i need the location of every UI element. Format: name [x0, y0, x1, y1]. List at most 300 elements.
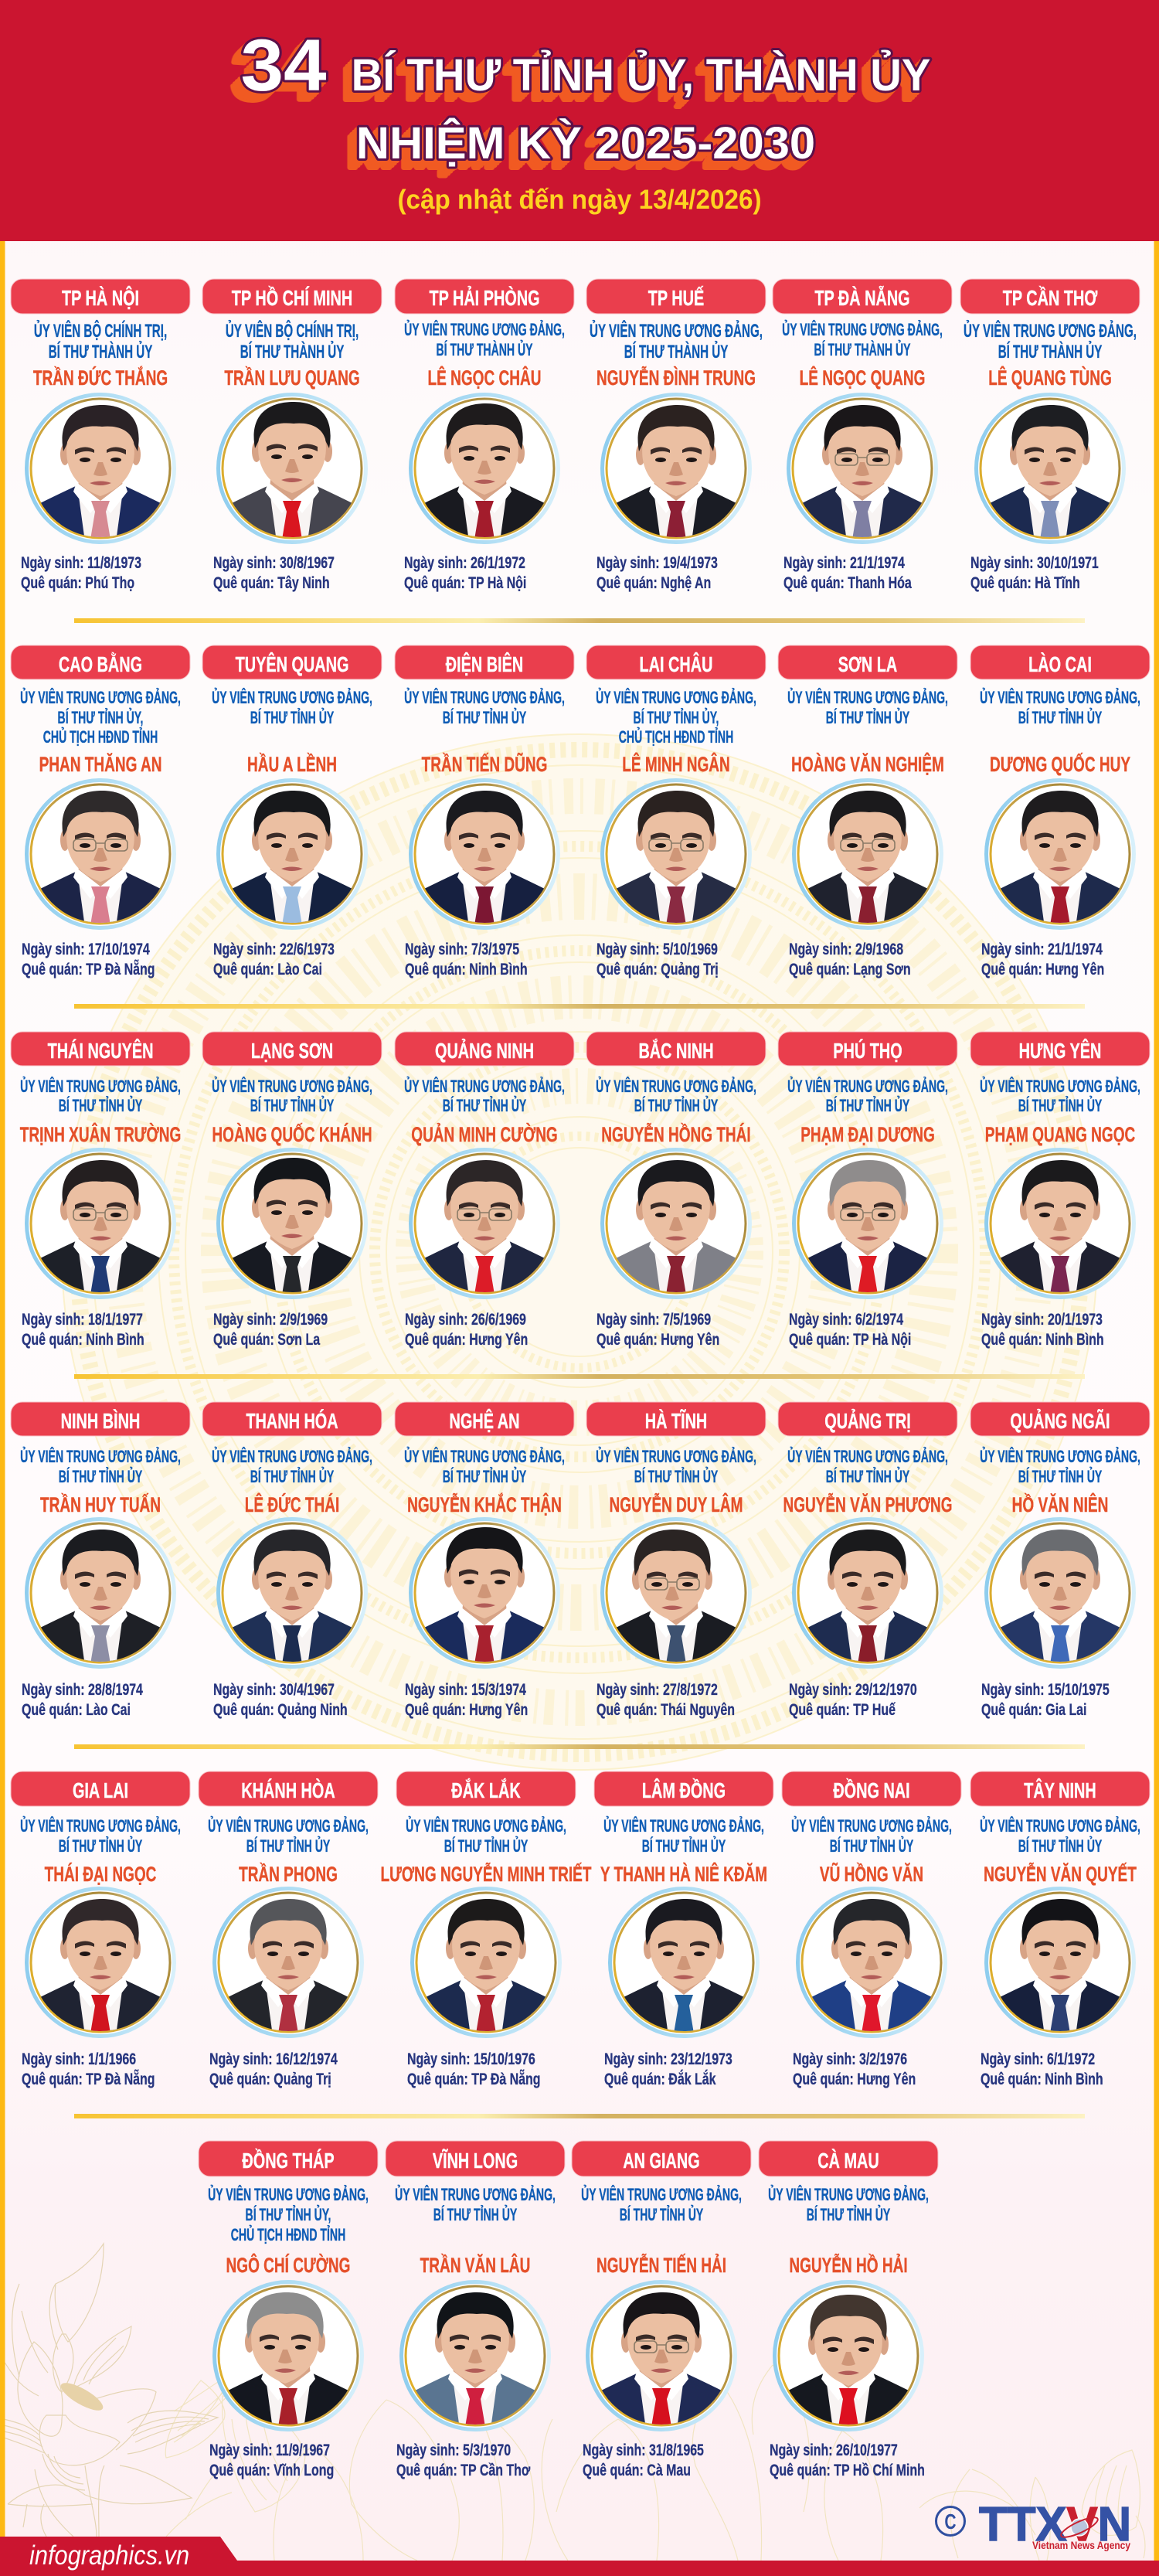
birth and hometown: Quê quán: TP Đà Nẵng — [22, 959, 155, 978]
birth and hometown: Ngày sinh: 21/1/1974 — [783, 553, 905, 572]
pill: Hà Tĩnh — [586, 1402, 766, 1436]
birth and hometown: Ngày sinh: 7/5/1969 — [596, 1310, 711, 1329]
role: ỦY VIÊN TRUNG ƯƠNG ĐẢNG, — [404, 320, 565, 339]
pill: Hà Tĩnh: HÀ TĨNH — [645, 1409, 707, 1434]
birth and hometown: Quê quán: TP Hồ Chí Minh — [770, 2461, 925, 2479]
birth and hometown: Quê quán: Sơn La — [213, 1330, 321, 1349]
pill: Lâm Đồng — [594, 1771, 773, 1806]
pill: TP Đà Nẵng — [773, 279, 952, 314]
birth and hometown: Ngày sinh: 6/2/1974 — [789, 1310, 904, 1329]
birth and hometown — [22, 1680, 143, 1719]
name: TRẦN HUY TUẤN — [40, 1492, 161, 1516]
pill: Lạng Sơn: LẠNG SƠN — [251, 1040, 333, 1063]
role: BÍ THƯ TỈNH ỦY — [250, 1467, 335, 1486]
name: NGUYỄN TIẾN HẢI — [596, 2251, 726, 2277]
pill: Nghệ An: NGHỆ AN — [450, 1409, 519, 1434]
role: BÍ THƯ TỈNH ỦY — [444, 1836, 529, 1856]
role: CHỦ TỊCH HĐND TỈNH — [619, 727, 733, 747]
name: TRẦN TIẾN DŨNG — [422, 752, 547, 776]
birth and hometown: Ngày sinh: 30/4/1967 — [213, 1680, 335, 1699]
role — [791, 1816, 952, 1856]
card: TP Đà Nẵng — [773, 279, 952, 592]
footer flag with site name — [0, 2537, 237, 2576]
pill: Quảng Ngãi — [970, 1402, 1150, 1436]
card: Tuyên Quang — [202, 645, 382, 978]
role: BÍ THƯ TỈNH ỦY — [642, 1836, 726, 1856]
pill: TP Hồ Chí Minh — [202, 279, 382, 314]
role: ỦY VIÊN TRUNG ƯƠNG ĐẢNG, — [20, 1077, 181, 1096]
name: Y THANH HÀ NIÊ KĐĂM — [600, 1862, 767, 1886]
birth and hometown — [596, 553, 718, 592]
pill: Tây Ninh — [970, 1771, 1150, 1806]
role: BÍ THƯ TỈNH ỦY, — [634, 708, 719, 727]
birth and hometown: Quê quán: Quảng Trị — [596, 960, 719, 978]
portrait — [794, 1150, 941, 1301]
decorative bronze drum pattern — [62, 734, 1097, 1770]
card: Quảng Ninh — [395, 1032, 574, 1349]
birth and hometown: Ngày sinh: 11/8/1973 — [21, 553, 141, 572]
birth and hometown: Quê quán: Cà Mau — [583, 2461, 691, 2479]
pill: Khánh Hòa — [199, 1771, 378, 1806]
card: Quảng Trị — [778, 1402, 957, 1719]
role: ỦY VIÊN TRUNG ƯƠNG ĐẢNG, — [212, 688, 372, 707]
portrait — [788, 394, 936, 546]
pill: TP Cần Thơ — [960, 279, 1140, 314]
role — [787, 1447, 948, 1486]
role: ỦY VIÊN TRUNG ƯƠNG ĐẢNG, — [208, 2185, 369, 2204]
birth and hometown: Ngày sinh: 26/10/1977 — [770, 2441, 898, 2459]
birth and hometown: Quê quán: Thanh Hóa — [783, 573, 912, 592]
role: BÍ THƯ TỈNH ỦY — [620, 2205, 704, 2224]
pill: Đắk Lắk — [396, 1771, 576, 1806]
birth and hometown: Ngày sinh: 28/8/1974 — [22, 1680, 143, 1699]
birth and hometown — [793, 2050, 916, 2088]
card: Phú Thọ — [778, 1032, 957, 1349]
pill: Đồng Tháp: ĐỒNG THÁP — [242, 2149, 335, 2173]
role: ỦY VIÊN BỘ CHÍNH TRỊ, — [34, 319, 167, 342]
role: ỦY VIÊN TRUNG ƯƠNG ĐẢNG, — [212, 1077, 372, 1096]
birth and hometown — [770, 2441, 925, 2479]
name: HOÀNG QUỐC KHÁNH — [212, 1122, 372, 1146]
card: TP Hà Nội — [11, 279, 190, 592]
birth and hometown: Quê quán: Ninh Bình — [981, 2070, 1103, 2088]
portrait — [218, 1519, 366, 1670]
name: TRẦN ĐỨC THẮNG — [33, 366, 168, 390]
role — [590, 319, 763, 362]
portrait — [986, 781, 1134, 931]
pill: TP Cần Thơ: TP CẦN THƠ — [1003, 286, 1098, 311]
card: TP Hải Phòng — [395, 279, 574, 592]
pill: Lào Cai: LÀO CAI — [1028, 652, 1092, 677]
role — [581, 2185, 742, 2224]
pill: Ninh Bình: NINH BÌNH — [61, 1409, 140, 1434]
footer flag with site name: infographics.vn — [29, 2540, 189, 2570]
name: NGUYỄN HỒNG THÁI — [601, 1121, 751, 1146]
birth and hometown: Ngày sinh: 30/8/1967 — [213, 553, 335, 572]
birth and hometown: Ngày sinh: 5/10/1969 — [596, 940, 718, 958]
birth and hometown — [21, 553, 141, 592]
pill: Thái Nguyên: THÁI NGUYÊN — [48, 1039, 153, 1063]
birth and hometown — [405, 1310, 528, 1349]
card: TP Cần Thơ — [960, 279, 1140, 592]
pill: Vĩnh Long — [386, 2141, 565, 2176]
portrait — [797, 1889, 946, 2040]
birth and hometown — [396, 2441, 531, 2479]
birth and hometown — [783, 553, 912, 592]
TTXVN logo: Vietnam News Agency — [1032, 2539, 1130, 2551]
role: ỦY VIÊN TRUNG ƯƠNG ĐẢNG, — [980, 1816, 1140, 1836]
name: HỒ VĂN NIÊN — [1012, 1492, 1108, 1516]
role: ỦY VIÊN TRUNG ƯƠNG ĐẢNG, — [596, 688, 756, 707]
role — [404, 1447, 565, 1486]
card: Nghệ An — [395, 1402, 574, 1719]
card: Lâm Đồng — [594, 1771, 773, 2088]
pill: Lạng Sơn — [202, 1032, 382, 1066]
portrait — [402, 2282, 549, 2433]
pill: Gia Lai — [11, 1771, 190, 1806]
name: LÊ QUANG TÙNG — [988, 366, 1112, 390]
birth and hometown: Ngày sinh: 17/10/1974 — [22, 940, 150, 958]
birth and hometown: Ngày sinh: 22/6/1973 — [213, 940, 335, 958]
pill: Đồng Nai: ĐỒNG NAI — [833, 1778, 910, 1803]
pill: TP Hồ Chí Minh: TP HỒ CHÍ MINH — [232, 286, 352, 311]
role: ỦY VIÊN TRUNG ƯƠNG ĐẢNG, — [787, 1077, 948, 1096]
card: Quảng Ngãi — [970, 1402, 1150, 1719]
birth and hometown: Quê quán: Hưng Yên — [793, 2070, 916, 2088]
role — [212, 688, 372, 727]
birth and hometown: Quê quán: Hưng Yên — [405, 1330, 528, 1349]
birth and hometown — [209, 2441, 334, 2479]
portrait — [26, 1150, 175, 1301]
role: ỦY VIÊN TRUNG ƯƠNG ĐẢNG, — [596, 1447, 756, 1466]
birth and hometown — [209, 2050, 338, 2088]
birth and hometown: Quê quán: Gia Lai — [981, 1700, 1087, 1719]
birth and hometown: Quê quán: Vĩnh Long — [209, 2461, 334, 2479]
pill: Tây Ninh: TÂY NINH — [1024, 1778, 1096, 1803]
role — [208, 2185, 369, 2244]
role: BÍ THƯ TỈNH ỦY — [433, 2205, 518, 2224]
pill: Quảng Ngãi: QUẢNG NGÃI — [1010, 1407, 1110, 1434]
birth and hometown — [981, 2050, 1103, 2088]
role — [596, 1447, 756, 1486]
role: ỦY VIÊN BỘ CHÍNH TRỊ, — [226, 319, 359, 342]
name: NGUYỄN VĂN PHƯƠNG — [783, 1491, 953, 1516]
birth and hometown: Ngày sinh: 26/6/1969 — [405, 1310, 526, 1329]
birth and hometown: Ngày sinh: 15/10/1975 — [981, 1680, 1110, 1699]
birth and hometown: Quê quán: TP Đà Nẵng — [22, 2069, 155, 2088]
name: THÁI ĐẠI NGỌC — [45, 1862, 157, 1886]
birth and hometown: Quê quán: Thái Nguyên — [596, 1700, 735, 1719]
birth and hometown: Quê quán: Quảng Ninh — [213, 1700, 348, 1719]
card: Lạng Sơn — [202, 1032, 382, 1349]
birth and hometown — [22, 2050, 155, 2088]
role — [980, 1816, 1140, 1856]
birth and hometown — [213, 1680, 348, 1719]
birth and hometown: Quê quán: Hưng Yên — [596, 1330, 719, 1349]
pill: Hưng Yên: HƯNG YÊN — [1019, 1039, 1101, 1063]
birth and hometown — [981, 1680, 1110, 1719]
card: Cà Mau — [759, 2141, 938, 2479]
name: HẦU A LỀNH — [247, 752, 337, 776]
role: CHỦ TỊCH HĐND TỈNH — [231, 2225, 345, 2244]
pill: TP Hải Phòng — [395, 279, 574, 314]
birth and hometown: Ngày sinh: 20/1/1973 — [981, 1310, 1103, 1329]
card: Ninh Bình — [11, 1402, 190, 1719]
pill: TP Huế — [586, 279, 766, 314]
pill: Cà Mau — [759, 2141, 938, 2176]
title line 2: NHIỆM KỲ 2025-2030 — [356, 117, 815, 168]
role: ỦY VIÊN TRUNG ƯƠNG ĐẢNG, — [404, 688, 565, 707]
role: ỦY VIÊN TRUNG ƯƠNG ĐẢNG, — [20, 688, 181, 707]
decorative lotus bottom — [165, 2365, 1145, 2561]
role: ỦY VIÊN TRUNG ƯƠNG ĐẢNG, — [596, 1077, 756, 1096]
card: Lào Cai — [970, 645, 1150, 978]
pill: Cà Mau: CÀ MAU — [817, 2149, 879, 2173]
card: Tây Ninh — [970, 1771, 1150, 2088]
role: ỦY VIÊN TRUNG ƯƠNG ĐẢNG, — [590, 319, 763, 342]
portrait — [26, 1889, 175, 2040]
pill: Bắc Ninh: BẮC NINH — [638, 1039, 714, 1063]
pill: Quảng Ninh — [395, 1032, 574, 1066]
decorative lotus bottom left — [2, 2244, 218, 2537]
birth and hometown: Quê quán: TP Cần Thơ — [396, 2461, 531, 2479]
title number 34: 34 — [241, 24, 326, 106]
role: BÍ THƯ TỈNH ỦY, — [58, 708, 143, 727]
birth and hometown — [407, 2050, 541, 2088]
birth and hometown — [596, 1680, 735, 1719]
birth and hometown — [213, 1310, 328, 1349]
portrait — [603, 781, 749, 931]
birth and hometown — [213, 553, 335, 592]
birth and hometown — [981, 940, 1104, 978]
birth and hometown: Quê quán: TP Hà Nội — [404, 573, 526, 592]
birth and hometown — [405, 1680, 528, 1719]
pill: Vĩnh Long: VĨNH LONG — [433, 2149, 518, 2173]
birth and hometown: Quê quán: Lạng Sơn — [789, 960, 911, 978]
name: TRỊNH XUÂN TRƯỜNG — [20, 1122, 181, 1146]
role: BÍ THƯ TỈNH ỦY — [59, 1467, 143, 1486]
name: TRẦN PHONG — [239, 1862, 338, 1886]
card: Cao Bằng — [11, 645, 190, 978]
role: BÍ THƯ TỈNH ỦY — [1018, 708, 1103, 727]
role: BÍ THƯ THÀNH ỦY — [49, 340, 152, 362]
footer band — [0, 2561, 1159, 2576]
role: BÍ THƯ THÀNH ỦY — [998, 340, 1102, 362]
role — [980, 1447, 1140, 1486]
role — [212, 1447, 372, 1486]
birth and hometown: Quê quán: Hưng Yên — [405, 1700, 528, 1719]
role: BÍ THƯ THÀNH ỦY — [240, 340, 344, 362]
pill: Phú Thọ — [778, 1032, 957, 1066]
pill: Sơn La: SƠN LA — [838, 653, 897, 677]
card: Sơn La — [778, 645, 957, 978]
role: BÍ THƯ TỈNH ỦY — [59, 1096, 143, 1115]
pill: Ninh Bình — [11, 1402, 190, 1436]
portrait — [411, 781, 558, 931]
birth and hometown: Quê quán: TP Huế — [789, 1700, 896, 1719]
birth and hometown — [404, 553, 526, 592]
name: DƯƠNG QUỐC HUY — [990, 752, 1130, 776]
birth and hometown: Quê quán: Hưng Yên — [981, 960, 1104, 978]
role: BÍ THƯ TỈNH ỦY — [634, 1467, 719, 1486]
portrait — [26, 781, 175, 931]
role: BÍ THƯ TỈNH ỦY — [634, 1096, 719, 1115]
role — [226, 319, 359, 362]
pill: Đắk Lắk: ĐẮK LẮK — [451, 1778, 521, 1803]
role — [782, 320, 943, 359]
portrait — [986, 1519, 1134, 1670]
role — [20, 1077, 181, 1115]
role — [395, 2185, 556, 2224]
birth and hometown: Ngày sinh: 31/8/1965 — [583, 2441, 704, 2459]
pill: Thái Nguyên — [11, 1032, 190, 1066]
portrait — [977, 394, 1123, 546]
birth and hometown: Ngày sinh: 15/3/1974 — [405, 1680, 526, 1699]
portrait — [794, 1519, 941, 1670]
portrait — [26, 394, 175, 546]
role: ỦY VIÊN TRUNG ƯƠNG ĐẢNG, — [20, 1447, 181, 1466]
title line 1: BÍ THƯ TỈNH ỦY, THÀNH ỦY — [352, 49, 930, 100]
role: CHỦ TỊCH HĐND TỈNH — [43, 727, 158, 747]
role — [980, 688, 1140, 727]
birth and hometown: Quê quán: Hà Tĩnh — [970, 573, 1080, 592]
role: ỦY VIÊN TRUNG ƯƠNG ĐẢNG, — [980, 1447, 1140, 1466]
birth and hometown: Ngày sinh: 11/9/1967 — [209, 2441, 330, 2459]
birth and hometown: Ngày sinh: 6/1/1972 — [981, 2050, 1095, 2068]
role — [20, 688, 181, 747]
role: BÍ THƯ TỈNH ỦY — [250, 1096, 335, 1115]
role — [212, 1077, 372, 1115]
birth and hometown — [596, 1310, 719, 1349]
birth and hometown: Ngày sinh: 19/4/1973 — [596, 553, 718, 572]
role: BÍ THƯ TỈNH ỦY — [1018, 1836, 1103, 1856]
birth and hometown: Ngày sinh: 1/1/1966 — [22, 2050, 136, 2068]
pill: TP Huế: TP HUẾ — [648, 286, 704, 311]
card: Bắc Ninh — [586, 1032, 766, 1349]
card: Điện Biên — [395, 645, 574, 978]
birth and hometown — [405, 940, 528, 978]
portrait — [603, 394, 749, 546]
role — [964, 319, 1137, 362]
portrait — [215, 2282, 362, 2433]
birth and hometown — [789, 1310, 911, 1349]
copyright icon — [936, 2507, 964, 2535]
card: Đồng Nai — [782, 1771, 961, 2088]
role — [603, 1816, 764, 1856]
birth and hometown — [604, 2050, 732, 2088]
role: ỦY VIÊN TRUNG ƯƠNG ĐẢNG, — [603, 1816, 764, 1836]
name: NGUYỄN VĂN QUYẾT — [984, 1860, 1137, 1886]
role: BÍ THƯ TỈNH ỦY — [826, 1467, 910, 1486]
left gold border — [0, 241, 5, 2561]
card: TP Hồ Chí Minh — [202, 279, 382, 592]
name: LÊ ĐỨC THÁI — [245, 1492, 339, 1516]
portrait — [603, 1519, 749, 1670]
pill: Cao Bằng — [11, 645, 190, 679]
pill: Quảng Trị — [778, 1402, 957, 1436]
birth and hometown: Quê quán: Ninh Bình — [22, 1330, 144, 1349]
role: ỦY VIÊN TRUNG ƯƠNG ĐẢNG, — [395, 2185, 556, 2204]
role — [768, 2185, 929, 2224]
role: ỦY VIÊN TRUNG ƯƠNG ĐẢNG, — [581, 2185, 742, 2204]
portrait — [218, 781, 366, 931]
copyright icon: C — [944, 2510, 957, 2534]
role: BÍ THƯ TỈNH ỦY — [246, 1836, 331, 1856]
name: LÊ MINH NGÂN — [622, 752, 730, 776]
portrait — [411, 1150, 558, 1301]
birth and hometown: Ngày sinh: 16/12/1974 — [209, 2050, 338, 2068]
role: BÍ THƯ TỈNH ỦY — [250, 708, 335, 727]
role — [20, 1447, 181, 1486]
birth and hometown: Ngày sinh: 21/1/1974 — [981, 940, 1103, 958]
role: BÍ THƯ TỈNH ỦY — [826, 708, 910, 727]
role: ỦY VIÊN TRUNG ƯƠNG ĐẢNG, — [782, 320, 943, 339]
pill: Lâm Đồng: LÂM ĐỒNG — [642, 1778, 726, 1803]
role: ỦY VIÊN TRUNG ƯƠNG ĐẢNG, — [404, 1077, 565, 1096]
role: BÍ THƯ THÀNH ỦY — [814, 340, 911, 359]
pill: Thanh Hóa: THANH HÓA — [246, 1409, 338, 1434]
role: BÍ THƯ TỈNH ỦY — [1018, 1467, 1103, 1486]
name: LÊ NGỌC CHÂU — [428, 366, 541, 390]
role: ỦY VIÊN TRUNG ƯƠNG ĐẢNG, — [787, 688, 948, 707]
name: LÊ NGỌC QUANG — [800, 366, 925, 390]
birth and hometown — [22, 940, 155, 978]
birth and hometown: Ngày sinh: 30/10/1971 — [970, 553, 1099, 572]
portrait — [411, 1519, 558, 1670]
role: ỦY VIÊN TRUNG ƯƠNG ĐẢNG, — [980, 688, 1140, 707]
subtitle date: (cập nhật đến ngày 13/4/2026) — [397, 185, 762, 215]
birth and hometown: Ngày sinh: 15/10/1976 — [407, 2050, 535, 2068]
role — [404, 688, 565, 727]
pill: Bắc Ninh — [586, 1032, 766, 1066]
card: TP Huế — [586, 279, 766, 592]
role — [20, 1816, 181, 1856]
role: ỦY VIÊN TRUNG ƯƠNG ĐẢNG, — [20, 1816, 181, 1836]
role: BÍ THƯ TỈNH ỦY — [443, 1467, 527, 1486]
birth and hometown: Ngày sinh: 29/12/1970 — [789, 1680, 917, 1699]
pill: An Giang — [572, 2141, 751, 2176]
role: BÍ THƯ TỈNH ỦY — [59, 1836, 143, 1856]
name: TRẦN LƯU QUANG — [224, 366, 360, 390]
role: ỦY VIÊN TRUNG ƯƠNG ĐẢNG, — [404, 1447, 565, 1466]
birth and hometown: Ngày sinh: 26/1/1972 — [404, 553, 525, 572]
birth and hometown: Quê quán: TP Hà Nội — [789, 1330, 911, 1349]
role: BÍ THƯ TỈNH ỦY — [830, 1836, 914, 1856]
role: ỦY VIÊN TRUNG ƯƠNG ĐẢNG, — [980, 1077, 1140, 1096]
role — [34, 319, 167, 362]
card: Thanh Hóa — [202, 1402, 382, 1719]
pill: Đồng Tháp — [199, 2141, 378, 2176]
name: NGUYỄN DUY LÂM — [610, 1491, 743, 1516]
pill: Hưng Yên — [970, 1032, 1150, 1066]
birth and hometown: Quê quán: TP Đà Nẵng — [407, 2069, 541, 2088]
role — [596, 688, 756, 747]
role — [406, 1816, 566, 1856]
birth and hometown: Ngày sinh: 3/2/1976 — [793, 2050, 907, 2068]
name: NGÔ CHÍ CƯỜNG — [226, 2253, 350, 2277]
card: Hưng Yên — [970, 1032, 1150, 1349]
pill: Đồng Nai — [782, 1771, 961, 1806]
card: Đắk Lắk — [381, 1771, 592, 2088]
birth and hometown: Ngày sinh: 2/9/1969 — [213, 1310, 328, 1329]
card: Lai Châu — [586, 645, 766, 978]
birth and hometown — [970, 553, 1099, 592]
name: NGUYỄN HỒ HẢI — [789, 2251, 908, 2277]
card: Gia Lai — [11, 1771, 190, 2088]
pill: Khánh Hòa: KHÁNH HÒA — [241, 1778, 335, 1803]
birth and hometown: Quê quán: Tây Ninh — [213, 573, 330, 592]
pill: Phú Thọ: PHÚ THỌ — [833, 1039, 902, 1063]
